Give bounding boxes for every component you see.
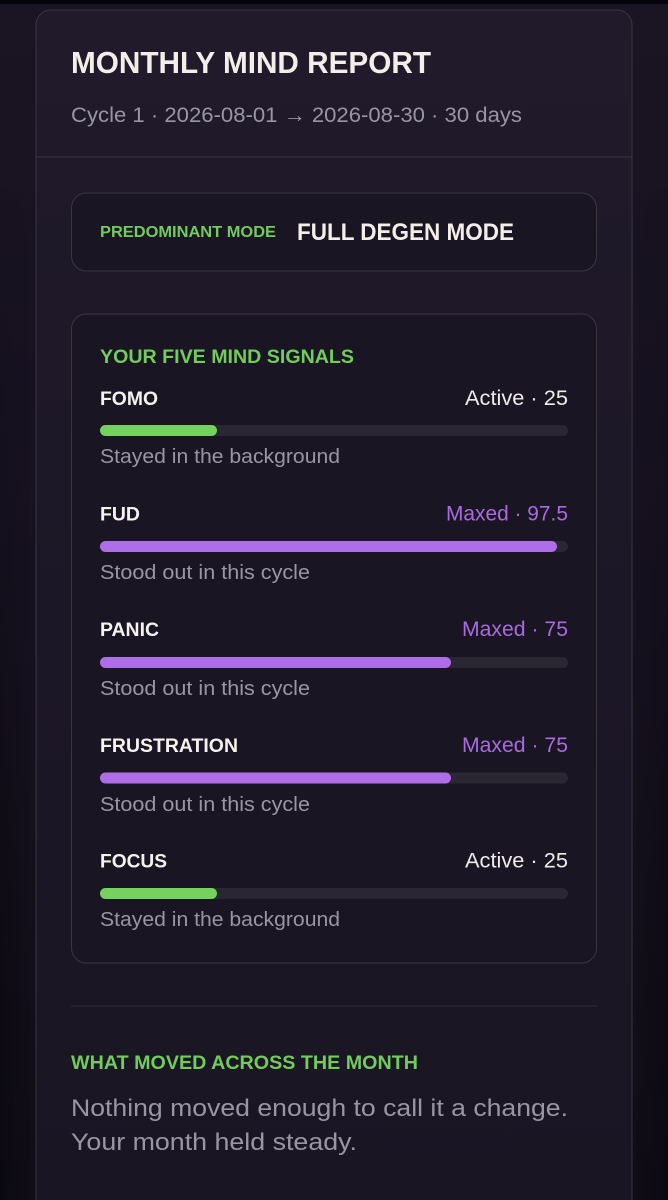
predominant mode value: FULL DEGEN MODE: [297, 219, 514, 246]
signal: FRUSTRATION: [100, 734, 568, 816]
signal: PANIC: Maxed · 75: [462, 618, 568, 641]
predominant mode label: PREDOMINANT MODE: [100, 224, 276, 241]
signal: FOCUS: Stayed in the background: [100, 909, 340, 931]
panel: five mind signals: [72, 314, 596, 963]
signal: FRUSTRATION: FRUSTRATION: [100, 736, 238, 757]
signal: FOCUS: Active · 25: [465, 850, 568, 872]
signal: FOMO: FOMO: [100, 389, 158, 410]
signal: FUD: [100, 502, 568, 584]
what moved heading: WHAT MOVED ACROSS THE MONTH: [71, 1053, 418, 1074]
section divider: [71, 1006, 597, 1007]
signal: PANIC: [100, 618, 568, 700]
signal: PANIC: Stood out in this cycle: [100, 678, 310, 700]
what moved body text: Your month held steady.: [71, 1129, 357, 1156]
signal: FOMO: [100, 387, 568, 468]
signals heading: YOUR FIVE MIND SIGNALS: [100, 347, 354, 368]
signal: FUD: Stood out in this cycle: [100, 562, 310, 584]
signal: FUD: Maxed · 97.5: [446, 502, 568, 526]
panel: what moved: [71, 1053, 575, 1156]
signal: FOCUS: [100, 850, 568, 931]
signal: FUD: FUD: [100, 504, 140, 526]
signal: FOCUS: FOCUS: [100, 852, 167, 872]
header divider: [36, 156, 632, 158]
signal: FOMO: Stayed in the background: [100, 446, 340, 468]
signal: FRUSTRATION: Maxed · 75: [462, 734, 568, 757]
panel: predominant mode: [72, 193, 596, 271]
signal: FOMO: Active · 25: [465, 387, 568, 410]
signal: PANIC: PANIC: [100, 620, 159, 641]
what moved body text: Nothing moved enough to call it a change.: [71, 1095, 568, 1122]
cycle date range: Cycle 1 · 2026-08-01 → 2026-08-30 · 30 days: [71, 104, 522, 127]
title: MONTHLY MIND REPORT: [71, 45, 431, 80]
signal: FRUSTRATION: Stood out in this cycle: [100, 794, 310, 816]
